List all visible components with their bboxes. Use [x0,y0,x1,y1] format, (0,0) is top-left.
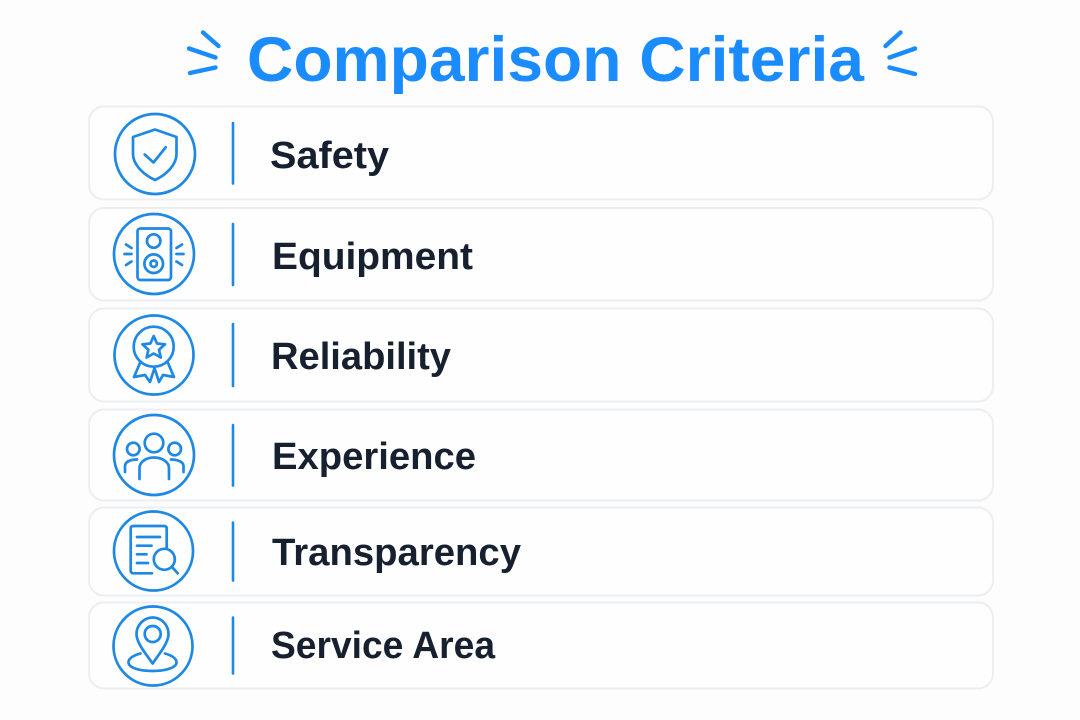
label: safety: Safety [270,135,389,177]
title: Comparison Criteria [247,25,865,95]
label: equipment: Equipment [272,236,473,278]
divider [232,123,234,184]
panel: service area [89,602,993,688]
panel: transparency [89,508,993,596]
label: reliability: Reliability [271,336,451,378]
panel: equipment [89,208,993,300]
icon: map pin [114,606,192,686]
divider [232,224,234,285]
icon: group of people [114,415,194,495]
label: transparency: Transparency [272,532,521,574]
icon: left title sparkle [189,32,218,73]
icon: speaker [114,214,194,294]
panel: experience [89,410,993,500]
panel: safety [89,106,993,200]
panel: reliability [89,308,993,402]
icon: document with magnifier [114,512,193,590]
icon: award ribbon [114,316,194,394]
icon: shield with check [115,114,195,194]
divider [232,522,234,580]
divider [232,324,234,386]
label: service area: Service Area [271,625,496,667]
icon: right title sparkle [886,32,915,74]
label: experience: Experience [272,436,476,478]
divider [232,618,234,674]
divider [232,425,234,486]
